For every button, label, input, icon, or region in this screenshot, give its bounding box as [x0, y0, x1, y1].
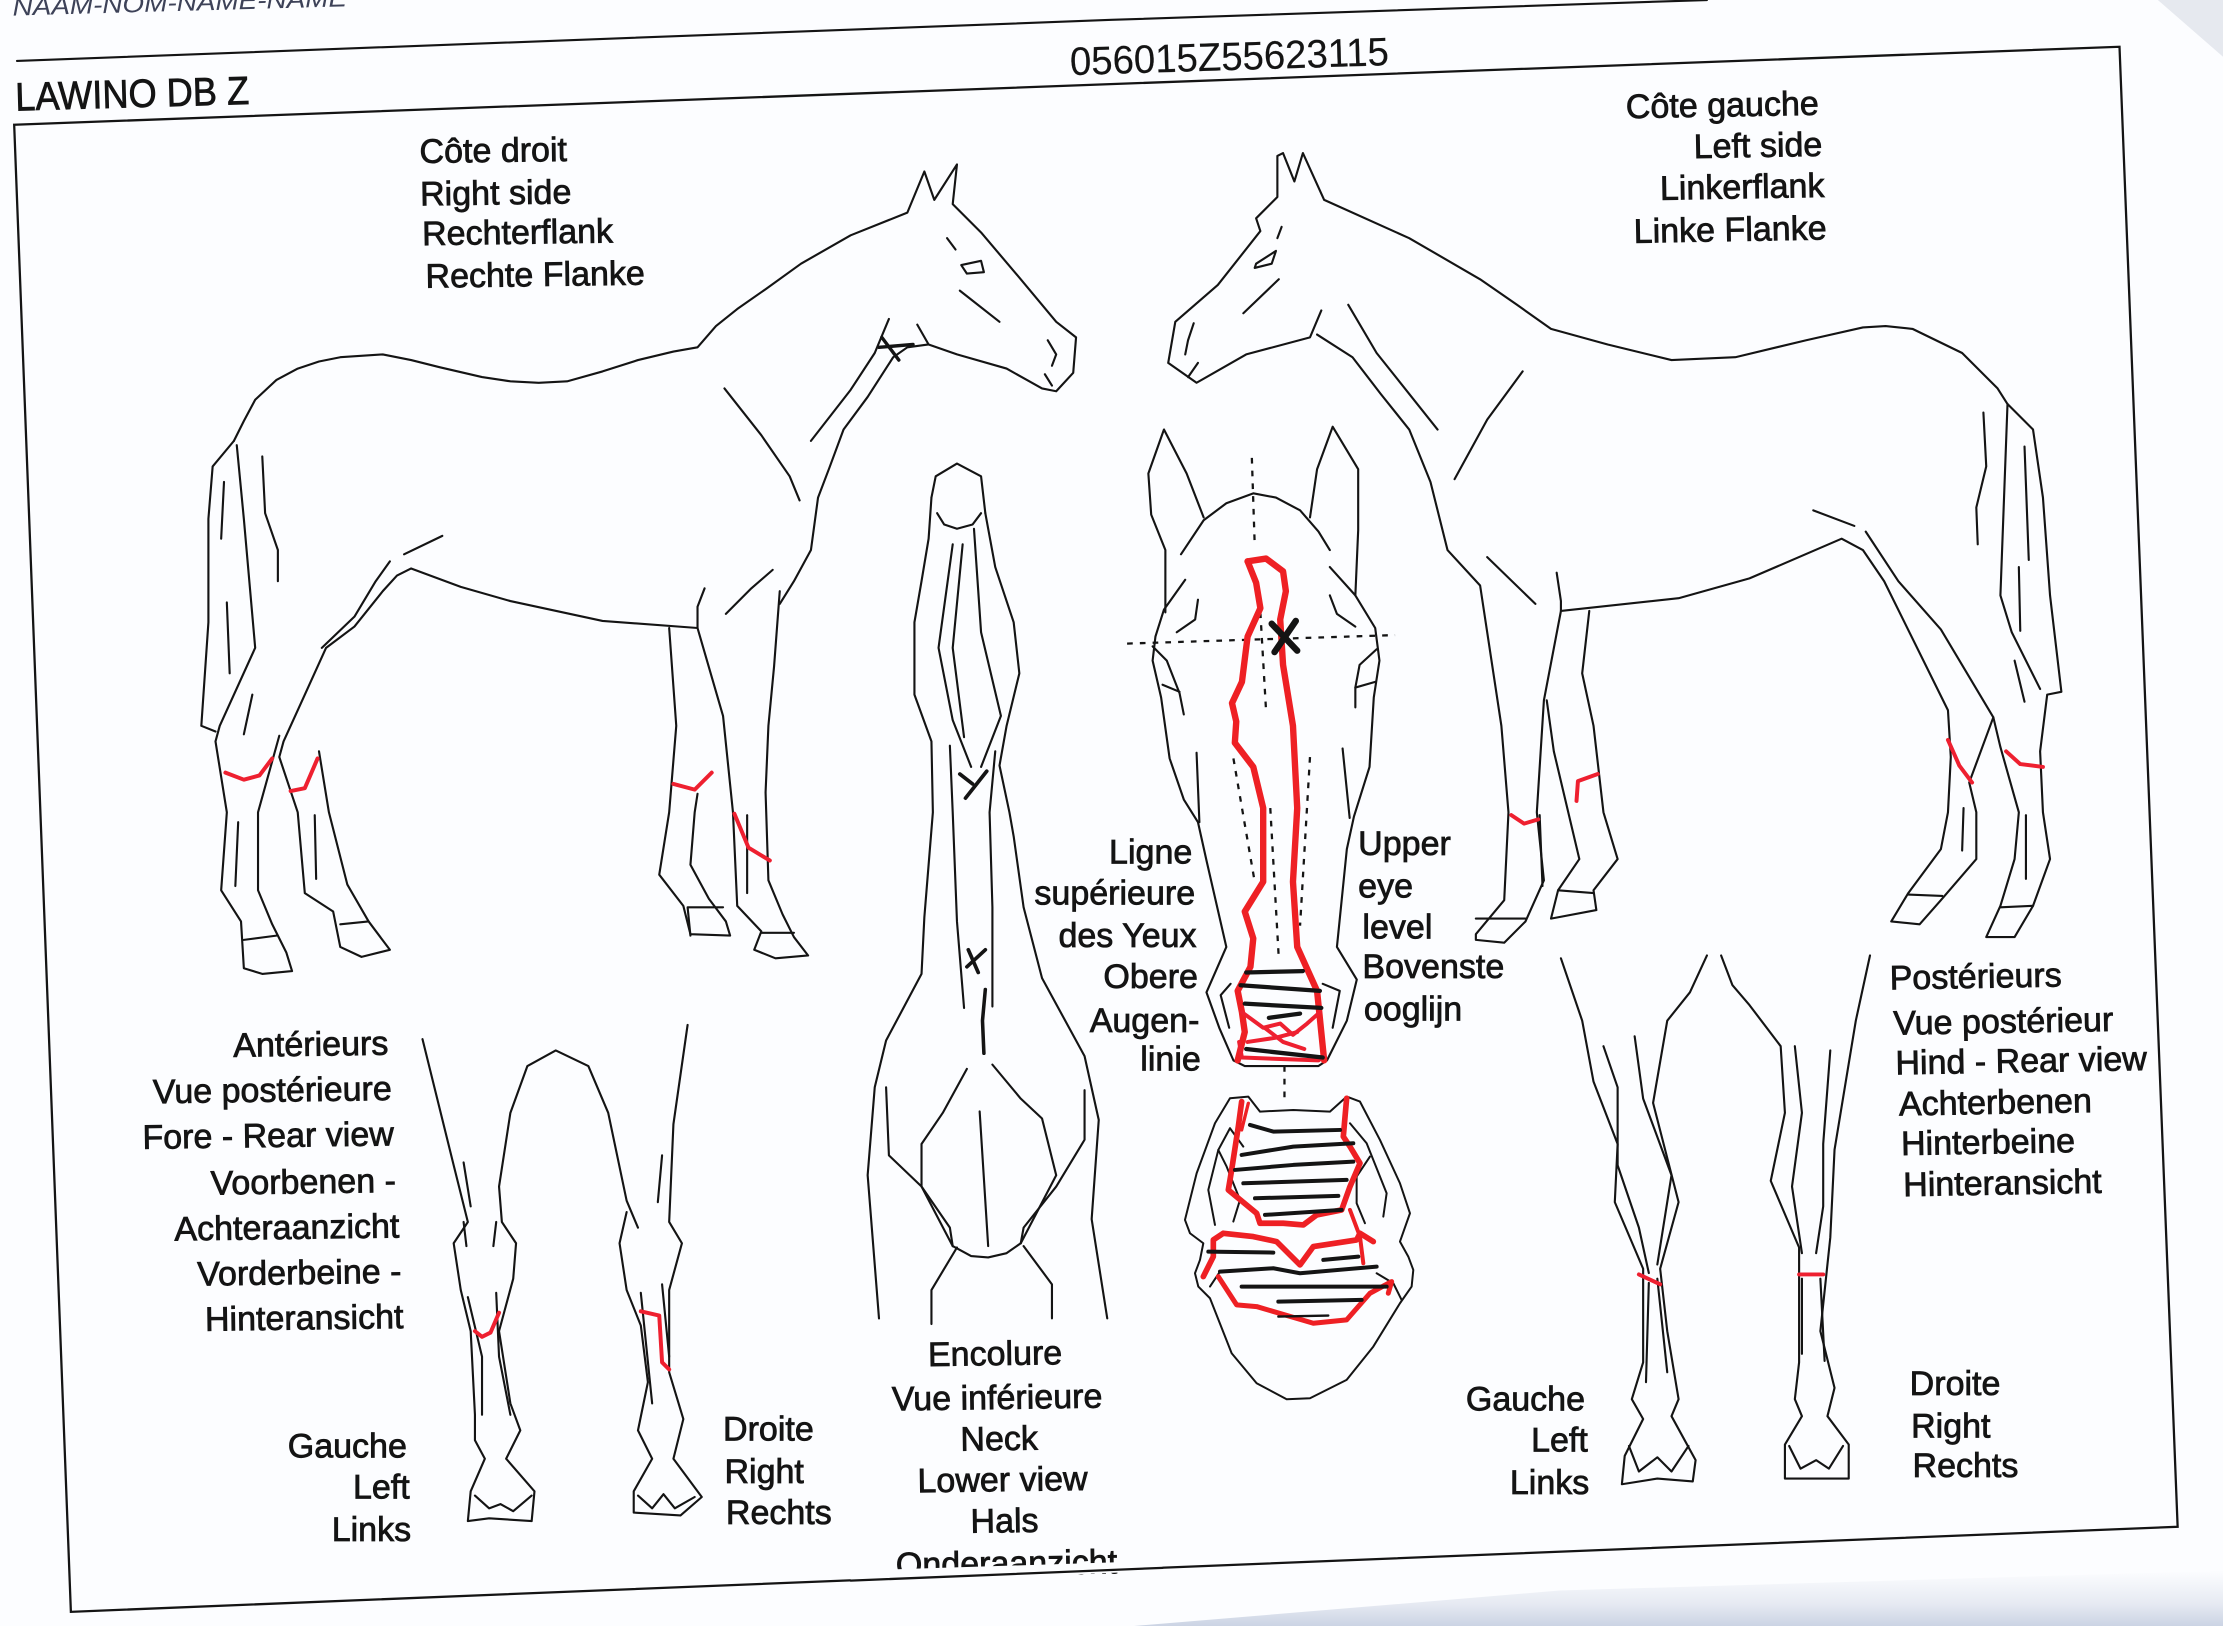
left side label: Linkerflank — [1660, 167, 1826, 208]
red lesion outline — [1203, 1098, 1392, 1323]
fore legs label: Antérieurs — [233, 1025, 389, 1065]
fore legs outline — [422, 1025, 702, 1521]
left label: Links — [332, 1511, 411, 1549]
panel: left side horse — [1168, 85, 2061, 943]
right label: Rechts — [726, 1494, 832, 1532]
eye level dashed guides — [1127, 458, 1395, 1099]
fore legs label: Vue postérieure — [153, 1070, 392, 1111]
right side label: Right side — [420, 173, 572, 214]
upper eye level label french german: Augen- — [1090, 1002, 1199, 1040]
right side label: Rechterflank — [422, 213, 614, 253]
hind legs label: Hind - Rear view — [1895, 1040, 2148, 1082]
panel: hind legs rear view — [1466, 955, 2150, 1502]
right label: Right — [1911, 1407, 1991, 1445]
hind legs label: Achterbenen — [1899, 1082, 2092, 1124]
upper eye level label french german: Obere — [1103, 958, 1198, 996]
right label: Droite — [723, 1410, 814, 1448]
upper eye level label french german: Ligne — [1109, 833, 1192, 871]
neck label: Vue inférieure — [892, 1378, 1103, 1419]
left side label: Left side — [1693, 126, 1823, 166]
right label: Rechts — [1913, 1447, 2018, 1485]
upper eye level label french german: des Yeux — [1058, 917, 1197, 955]
red lesion marks — [475, 1311, 669, 1369]
black x mark on throat — [879, 337, 913, 360]
muzzle outline — [1185, 1097, 1413, 1399]
fore legs label — [141, 1025, 404, 1340]
panel: right side horse — [201, 130, 1076, 974]
left label — [1466, 1381, 1589, 1502]
left side label: Côte gauche — [1626, 85, 1819, 126]
upper eye level label english dutch: Upper — [1358, 825, 1451, 863]
hind legs label — [1889, 955, 2150, 1204]
left label: Gauche — [288, 1427, 407, 1465]
hind legs outline — [1561, 955, 1870, 1484]
left side label — [1626, 85, 1827, 251]
black hatching — [1208, 1125, 1387, 1317]
left label: Gauche — [1466, 1381, 1585, 1419]
upper eye level label english dutch: level — [1362, 908, 1432, 946]
panel: neck lower view — [851, 464, 1163, 1584]
neck label: Neck — [960, 1420, 1039, 1459]
left label: Links — [1510, 1464, 1589, 1502]
fore legs label: Achteraanzicht — [174, 1207, 400, 1249]
neck label: Hals — [970, 1502, 1039, 1541]
red lesion marks — [225, 758, 770, 860]
red lesion marks — [1511, 740, 2043, 824]
drawn vertical mark — [982, 989, 985, 1053]
hind legs label: Hinterbeine — [1901, 1122, 2075, 1163]
hind legs label: Postérieurs — [1889, 956, 2062, 997]
right side label: Côte droit — [419, 131, 568, 171]
black x mark — [1272, 621, 1297, 652]
horse outline facing right — [201, 164, 1076, 974]
upper eye level label french german — [1034, 833, 1201, 1078]
upper eye level label french german: supérieure — [1034, 874, 1195, 912]
left label: Left — [353, 1468, 410, 1506]
fore legs label: Hinteransicht — [205, 1298, 404, 1339]
upper eye level label english dutch: ooglijn — [1364, 991, 1462, 1029]
red lesion marks — [1639, 1274, 1823, 1284]
right label: Right — [724, 1453, 804, 1491]
registration number: 056015Z55623115 — [1069, 30, 1390, 84]
fore legs label: Vorderbeine - — [197, 1253, 402, 1294]
red blaze outline — [1232, 559, 1324, 1060]
head outline — [1148, 427, 1379, 1066]
hind legs label: Hinteransicht — [1903, 1163, 2103, 1204]
left side label: Linke Flanke — [1633, 209, 1827, 251]
neck label — [891, 1333, 1118, 1584]
black x marks — [960, 771, 987, 972]
right label — [723, 1410, 832, 1532]
fore legs label: Voorbenen - — [210, 1162, 396, 1203]
upper eye level label english dutch — [1358, 825, 1504, 1029]
left label — [288, 1427, 411, 1549]
right label — [1910, 1365, 2018, 1485]
neck label: Lower view — [917, 1460, 1088, 1500]
panel: head front view — [1034, 427, 1504, 1399]
upper eye level label english dutch: Bovenste — [1362, 948, 1504, 986]
neck label: Encolure — [928, 1334, 1062, 1374]
horse name title: LAWINO DB Z — [15, 69, 250, 120]
panel: fore legs rear view — [141, 1025, 832, 1549]
neck label: Onderaanzicht — [896, 1543, 1118, 1584]
horse outline facing left — [1168, 153, 2061, 943]
fore legs label: Fore - Rear view — [142, 1115, 395, 1157]
right side label: Rechte Flanke — [425, 255, 645, 296]
upper eye level label french german: linie — [1140, 1040, 1201, 1078]
black hatching on upper muzzle — [1241, 971, 1323, 1058]
right side label — [419, 130, 645, 296]
hind legs label: Vue postérieur — [1893, 1001, 2114, 1043]
right label: Droite — [1910, 1365, 2000, 1403]
left label: Left — [1531, 1422, 1588, 1460]
upper eye level label english dutch: eye — [1358, 867, 1413, 905]
neck outline — [868, 464, 1107, 1324]
lower muzzle drawing — [1185, 1097, 1413, 1399]
